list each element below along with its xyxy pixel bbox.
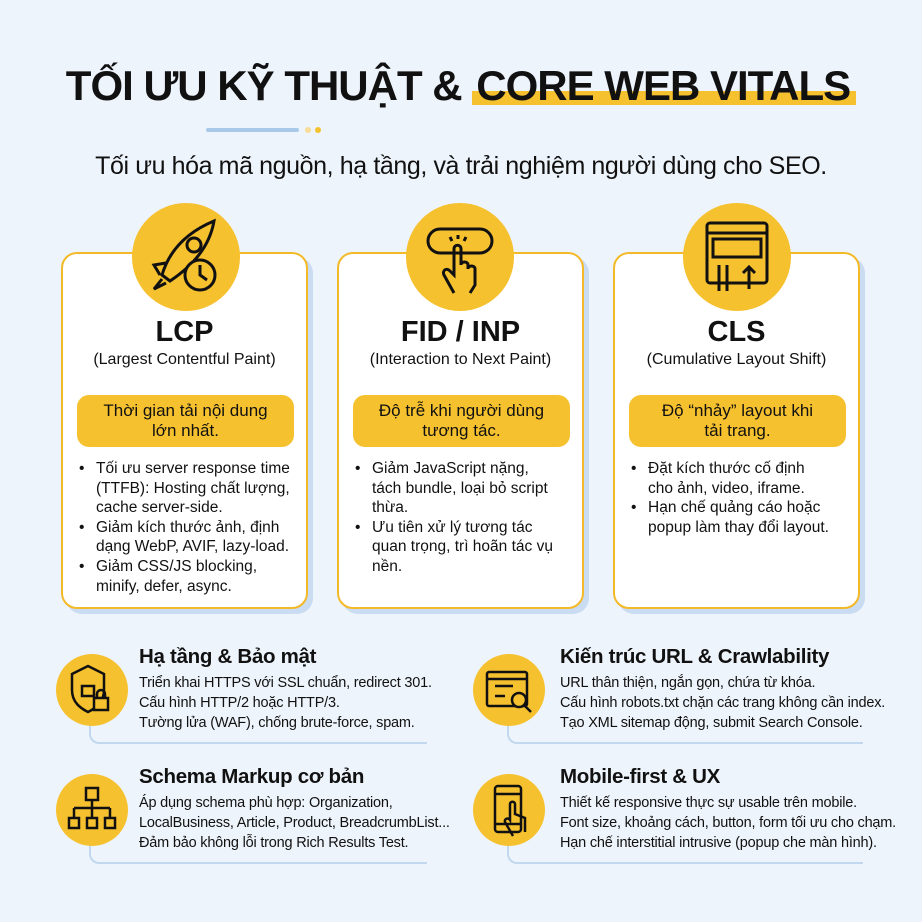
bullet list: cho ảnh, video, iframe. xyxy=(648,480,805,497)
title: TỐI ƯU KỸ THUẬT & CORE WEB VITALS xyxy=(66,62,850,109)
text: LocalBusiness, Article, Product, BreadcrumbList... xyxy=(139,815,450,831)
text: Cấu hình robots.txt chặn các trang không cần index. xyxy=(560,695,885,711)
subheading: (Interaction to Next Paint) xyxy=(370,351,551,368)
text xyxy=(560,795,896,851)
title: Hạ tầng & Bảo mật xyxy=(139,645,316,668)
bullet list: quan trọng, trì hoãn tác vụ xyxy=(372,538,553,555)
text: URL thân thiện, ngắn gọn, chứa từ khóa. xyxy=(560,675,815,691)
text xyxy=(139,675,432,731)
bullet list: tách bundle, loại bỏ script xyxy=(372,480,548,497)
bullet list: Giảm JavaScript nặng, xyxy=(372,460,529,477)
section: Hạ tầng & Bảo mật xyxy=(56,645,432,744)
subheading: (Cumulative Layout Shift) xyxy=(647,351,826,368)
text: Đảm bảo không lỗi trong Rich Results Test. xyxy=(139,835,408,851)
bullet list: Giảm kích thước ảnh, định xyxy=(96,519,279,536)
icon: rocket clock xyxy=(132,203,240,311)
connector xyxy=(507,812,863,864)
panel: CLS xyxy=(613,252,860,609)
connector xyxy=(89,692,427,744)
section: Kiến trúc URL xyxy=(473,645,885,744)
icon: layout shift xyxy=(683,203,791,311)
bullet list xyxy=(632,460,829,536)
icon: hierarchy xyxy=(56,774,128,846)
bullet list xyxy=(80,460,290,595)
bullet list: minify, defer, async. xyxy=(96,578,232,595)
bullet list: dạng WebP, AVIF, lazy-load. xyxy=(96,538,289,555)
text: Thiết kế responsive thực sự usable trên mobile. xyxy=(560,795,857,811)
callout pill: Độ trễ khi người dùng xyxy=(379,401,544,420)
title: Schema Markup cơ bản xyxy=(139,765,364,788)
panel: FID / INP xyxy=(337,252,584,609)
section: Mobile-first & UX xyxy=(473,765,896,864)
text xyxy=(560,674,885,731)
callout pill xyxy=(629,395,846,447)
decorative accent line xyxy=(206,128,299,132)
callout pill: Độ “nhảy” layout khi xyxy=(662,401,813,420)
icon: phone touch xyxy=(473,774,545,846)
icon: shield lock xyxy=(56,654,128,726)
bullet list: Hạn chế quảng cáo hoặc xyxy=(648,499,820,516)
heading: LCP: LCP xyxy=(156,316,214,348)
callout pill xyxy=(77,395,294,447)
text: Triển khai HTTPS với SSL chuẩn, redirect 301. xyxy=(139,675,432,691)
section: Schema Markup xyxy=(56,765,450,864)
bullet list: thừa. xyxy=(372,499,408,516)
callout pill: tải trang. xyxy=(704,421,771,440)
text: Tường lửa (WAF), chống brute-force, spam. xyxy=(139,715,415,731)
title: Mobile-first & UX xyxy=(560,765,720,788)
bullet list: (TTFB): Hosting chất lượng, xyxy=(96,480,290,497)
bullet list: Ưu tiên xử lý tương tác xyxy=(372,519,532,536)
heading: FID / INP: FID / INP xyxy=(401,316,520,348)
icon: sitemap search xyxy=(473,654,545,726)
callout pill: tương tác. xyxy=(422,421,501,440)
connector xyxy=(89,812,427,864)
subheading: (Largest Contentful Paint) xyxy=(93,351,276,368)
bullet list xyxy=(356,460,553,575)
text: Hạn chế interstitial intrusive (popup che màn hình). xyxy=(560,835,877,851)
text: Tạo XML sitemap động, submit Search Console. xyxy=(560,715,863,731)
text: Font size, khoảng cách, button, form tối ưu cho chạm. xyxy=(560,815,896,831)
callout pill: Thời gian tải nội dung xyxy=(103,401,268,420)
icon: click hand xyxy=(406,203,514,311)
subtitle: Tối ưu hóa mã nguồn, hạ tầng, và trải nghiệm người dùng cho SEO. xyxy=(95,152,827,180)
heading: CLS: CLS xyxy=(708,316,766,348)
text: Cấu hình HTTP/2 hoặc HTTP/3. xyxy=(139,695,340,711)
bullet list: Đặt kích thước cố định xyxy=(648,460,805,477)
bullet list: Tối ưu server response time xyxy=(96,460,290,477)
bullet list: nền. xyxy=(372,558,402,575)
callout pill: lớn nhất. xyxy=(152,421,219,440)
text xyxy=(139,794,450,851)
bullet list: cache server-side. xyxy=(96,499,223,516)
connector xyxy=(507,692,863,744)
bullet list: popup làm thay đổi layout. xyxy=(648,519,829,536)
text: Áp dụng schema phù hợp: Organization, xyxy=(139,795,393,811)
bullet list: Giảm CSS/JS blocking, xyxy=(96,558,257,575)
callout pill xyxy=(353,395,570,447)
title: Kiến trúc URL & Crawlability xyxy=(560,645,829,668)
panel: LCP xyxy=(61,252,308,609)
